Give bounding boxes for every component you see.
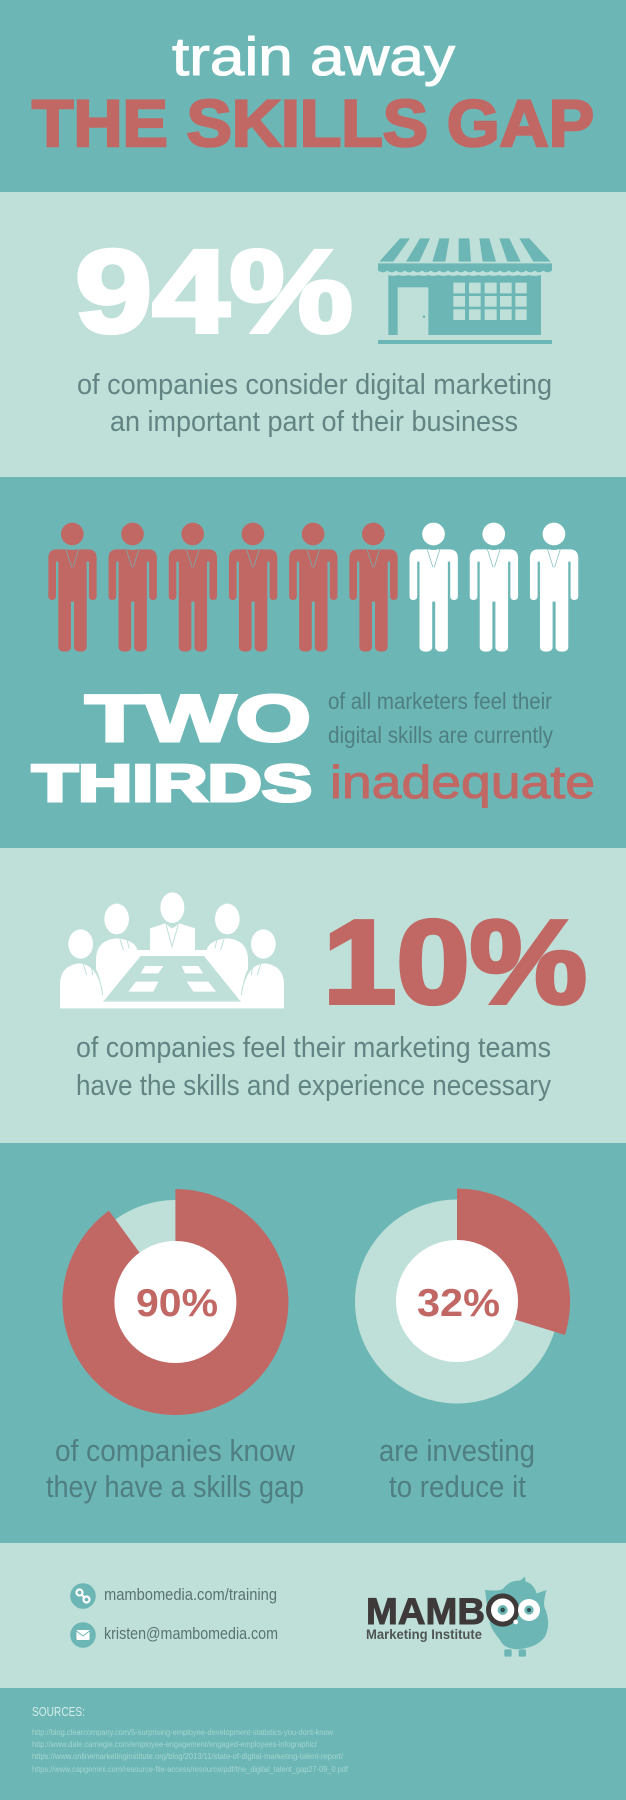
source links: [32, 1728, 349, 1774]
caption: 94 percent: [77, 369, 552, 438]
icon: white person 9: [530, 523, 578, 652]
icon: red person 3: [169, 523, 217, 652]
caption: 94 percent: an important part of their business: [110, 406, 518, 438]
title: the skills gap: THE SKILLS GAP: [32, 86, 594, 160]
title: train away: train away: [172, 27, 455, 87]
icon: red person 2: [109, 523, 157, 652]
text: inadequate: inadequate: [330, 756, 595, 808]
heading: two thirds: THIRDS: [32, 755, 312, 813]
value: 90%: 90%: [136, 1282, 218, 1325]
panel: two thirds: [0, 477, 626, 848]
pictogram row: nine people: [48, 523, 578, 652]
logo: Mambo Marketing Institute: [366, 1577, 548, 1657]
logo wordmark: MAMB: [366, 1591, 485, 1632]
source links: http://blog.clearcompany.com/5-surprising-employee-development-statistics-you-dont-know: [32, 1728, 333, 1737]
panel: sources: [0, 1688, 626, 1800]
caption: 32 percent: [379, 1433, 535, 1504]
icon: storefront: [378, 238, 552, 344]
panel: 94 percent: [0, 192, 626, 477]
icon: red person 4: [229, 523, 277, 652]
caption: 90 percent: of companies know: [55, 1433, 296, 1468]
logo tagline: Marketing Institute: [366, 1626, 482, 1642]
source links: http://www.dale.carnegie.com/employee-engagement/engaged-employees-infographic/: [32, 1740, 318, 1749]
caption: 10 percent: of companies feel their marketing teams: [76, 1032, 551, 1064]
text: marketers feel skills: [328, 688, 553, 748]
caption: 94 percent: of companies consider digital marketing: [77, 369, 552, 401]
source links: https://www.capgemini.com/resource-file-access/resource/pdf/the_digital_talent_gap27-09_0.pdf: [32, 1765, 349, 1774]
caption: 32 percent: to reduce it: [389, 1469, 526, 1504]
caption: 10 percent: have the skills and experience necessary: [76, 1070, 551, 1102]
value: 32%: 32%: [417, 1282, 500, 1325]
icon: owl: [485, 1577, 548, 1657]
panel: donut charts: [0, 1143, 626, 1543]
icon: white person 7: [410, 523, 458, 652]
heading: two thirds: [32, 681, 312, 813]
panel: 10 percent: [0, 848, 626, 1143]
panel: header: [0, 0, 626, 192]
heading: sources: SOURCES:: [32, 1704, 85, 1719]
icon: link: [70, 1583, 96, 1609]
caption: 90 percent: they have a skills gap: [46, 1469, 304, 1504]
source links: https://www.onlinemarketinginstitute.org/blog/2013/11/state-of-digital-marketing-talent-report/: [32, 1752, 344, 1761]
caption: 10 percent: [76, 1032, 551, 1102]
icon: email: [70, 1622, 96, 1648]
panel: contact and logo: [0, 1543, 626, 1688]
icon: white person 8: [470, 523, 518, 652]
text: email address: kristen@mambomedia.com: [104, 1624, 278, 1643]
text: website: mambomedia.com/training: [104, 1585, 277, 1604]
icon: red person 1: [48, 523, 97, 652]
statistic: 94%: 94%: [75, 226, 353, 358]
donut chart: 32 percent: [355, 1188, 570, 1404]
caption: 90 percent: [46, 1433, 304, 1504]
heading: two thirds: TWO: [85, 681, 311, 755]
statistic: 10%: 10%: [323, 896, 587, 1029]
text: marketers feel skills: of all marketers feel their: [328, 688, 552, 714]
icon: red person 5: [289, 523, 337, 652]
icon: meeting table: [60, 892, 284, 1008]
donut chart: 90 percent: [62, 1189, 288, 1415]
icon: red person 6: [349, 523, 398, 652]
caption: 32 percent: are investing: [379, 1433, 535, 1468]
text: marketers feel skills: digital skills are currently: [328, 722, 553, 748]
